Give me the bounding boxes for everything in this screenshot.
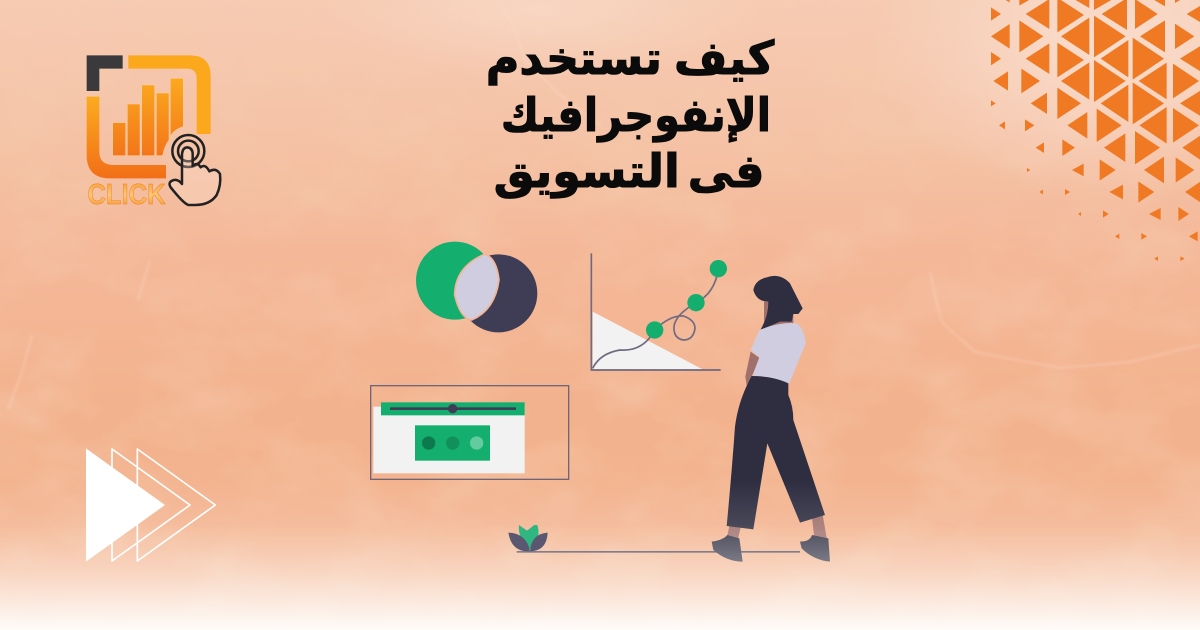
venn diagram	[416, 242, 537, 332]
logo frame: bottom left	[87, 97, 166, 178]
logo hand pointer	[170, 135, 220, 205]
logo corner: dark	[87, 55, 123, 91]
ground line	[517, 551, 800, 553]
title: فى التسويق	[494, 144, 764, 198]
decorative triangle pattern, top right	[991, 0, 1200, 261]
logo wordmark: CLICK	[87, 179, 166, 211]
title: الإنفوجرافيك	[501, 88, 771, 142]
logo bars	[113, 78, 183, 156]
bottom fade overlay	[0, 480, 1200, 630]
logo frame: top right	[128, 55, 211, 134]
slider window	[371, 386, 569, 479]
title: كيف تستخدم	[486, 31, 774, 85]
icon: flower plant	[508, 525, 548, 552]
illustration right: chart, woman and ground	[516, 253, 830, 562]
illustration left: venn diagram and slider window	[370, 242, 570, 480]
woman	[712, 276, 830, 562]
title	[486, 31, 775, 199]
line chart	[591, 253, 727, 370]
logo: CLICK bar chart with hand pointer	[86, 55, 222, 211]
icon: play arrows	[86, 448, 216, 562]
